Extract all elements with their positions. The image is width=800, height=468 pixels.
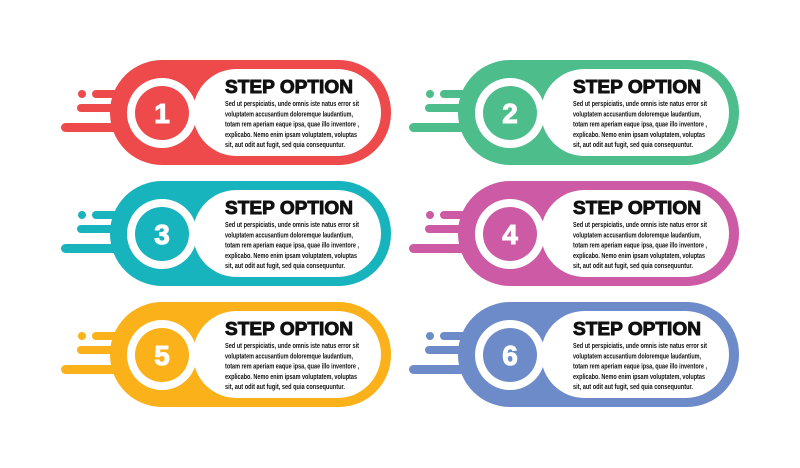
speed lines 3 (61, 211, 132, 253)
heading 4: STEP OPTION (573, 197, 701, 218)
speed lines 6 (409, 332, 480, 374)
speed lines 4 (409, 211, 480, 253)
panel: step 6 (409, 302, 739, 407)
number 6: 6 (502, 340, 518, 371)
heading 6: STEP OPTION (573, 318, 701, 339)
panel: step 5 (61, 302, 391, 407)
panel: step 3 (61, 181, 391, 286)
text 4 (573, 220, 707, 270)
number 2: 2 (502, 98, 518, 129)
heading 2: STEP OPTION (573, 76, 701, 97)
heading 3: STEP OPTION (225, 197, 353, 218)
number 5: 5 (154, 340, 170, 371)
panel: step 4 (409, 181, 739, 286)
speed lines 1 (61, 90, 132, 132)
speed lines 5 (61, 332, 132, 374)
heading 5: STEP OPTION (225, 318, 353, 339)
number 3: 3 (154, 219, 170, 250)
panel: step 2 (409, 60, 739, 165)
number 4: 4 (502, 219, 518, 250)
speed lines 2 (409, 90, 480, 132)
text 1 (225, 99, 359, 149)
text 3 (225, 220, 359, 270)
text 6 (573, 341, 707, 391)
number 1: 1 (154, 98, 170, 129)
text 2 (573, 99, 707, 149)
panel: step 1 (61, 60, 391, 165)
text 5 (225, 341, 359, 391)
heading 1: STEP OPTION (225, 76, 353, 97)
